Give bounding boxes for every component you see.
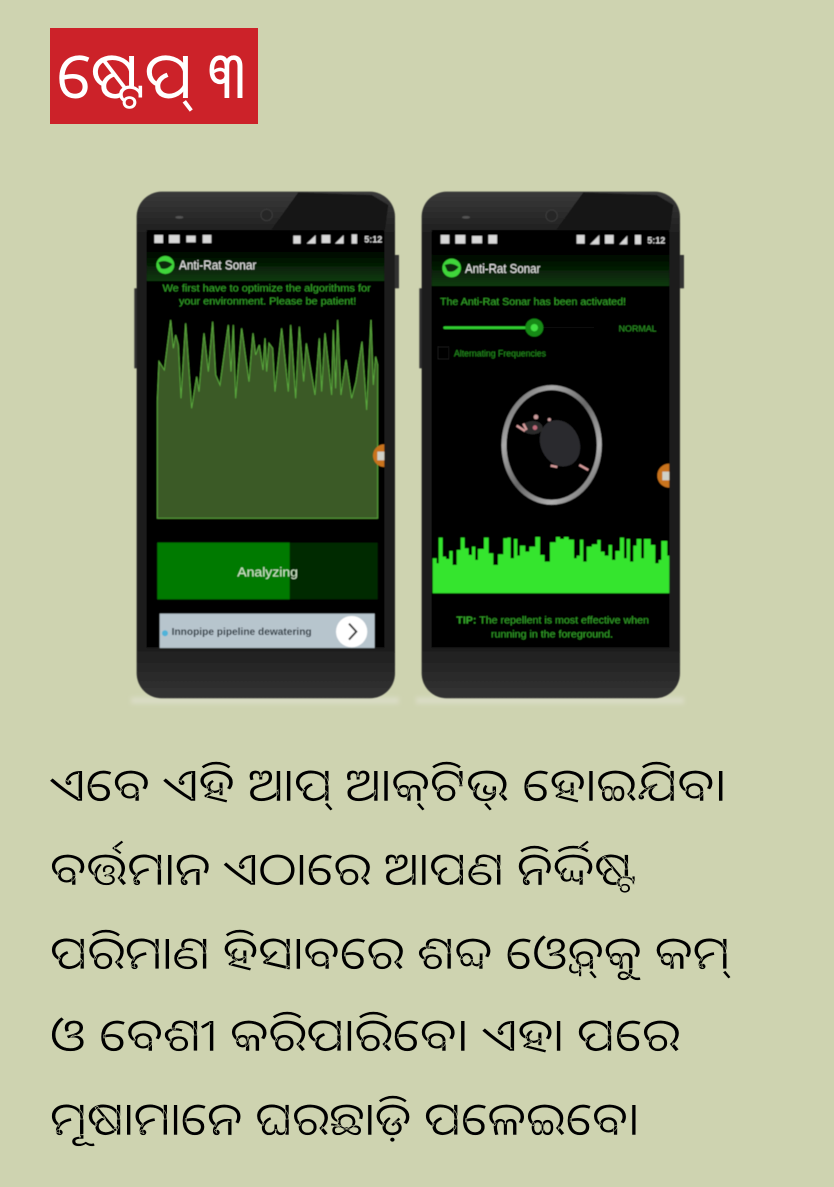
phone body	[134, 192, 399, 698]
line 1: ଏବେ ଏହି ଆପ୍ ଆକ୍‌ଟିଭ୍ ହୋଇଯିବ।	[49, 753, 727, 815]
status bar: 5:12	[364, 235, 382, 245]
status bar	[441, 235, 665, 245]
instruction text	[162, 284, 372, 307]
status bar	[154, 234, 382, 245]
ad banner: Innopipe pipeline dewatering	[172, 627, 312, 638]
instruction text: your environment. Please be patient!	[179, 296, 356, 307]
app header: Anti-Rat Sonar	[179, 257, 257, 272]
tip text: running in the foreground.	[491, 630, 613, 641]
phone body	[419, 192, 684, 698]
progress bar: analyzing: Analyzing	[237, 565, 298, 579]
sound level bars	[433, 537, 669, 593]
app header	[147, 248, 384, 281]
floating orange button	[373, 444, 384, 467]
ad banner	[160, 614, 375, 648]
instruction text: We first have to optimize the algorithms for	[162, 284, 372, 295]
heading badge: ଷ୍ଟେପ୍ ୩	[57, 30, 244, 117]
line 2: ବର୍ତ୍ତମାନ ଏଠାରେ ଆପଣ ନିର୍ଦ୍ଦିଷ୍ଟ	[50, 837, 637, 899]
line 3: ପରିମାଣ ହିସାବରେ ଶବ୍ଦ ଓ୍ୱେବ୍‌କୁ କମ୍	[50, 921, 732, 983]
line 4: ଓ ବେଶୀ କରିପାରିବେ। ଏହା ପରେ	[50, 1003, 680, 1065]
line 5: ମୂଷାମାନେ ଘରଛାଡ଼ି ପଳେଇବେ।	[50, 1087, 640, 1149]
alternating frequencies checkbox: Alternating Frequencies	[454, 348, 546, 358]
body text	[49, 753, 732, 1149]
floating orange button	[657, 464, 669, 488]
waveform chart	[157, 320, 378, 518]
status bar: 5:12	[647, 235, 665, 245]
progress bar: analyzing	[157, 543, 378, 599]
app header	[432, 251, 669, 286]
activated message: The Anti-Rat Sonar has been activated!	[440, 297, 626, 308]
alternating frequencies checkbox	[438, 347, 546, 359]
rat in silver ring	[504, 388, 599, 502]
photo halo	[131, 697, 684, 704]
volume slider	[443, 319, 657, 337]
volume slider: NORMAL	[619, 324, 657, 334]
app header: Anti-Rat Sonar	[465, 261, 541, 276]
phone: analyzing screen	[134, 192, 399, 698]
phone: activated screen	[419, 192, 684, 698]
tip text: TIP: The repellent is most effective when	[456, 616, 649, 627]
tip text	[456, 616, 649, 641]
